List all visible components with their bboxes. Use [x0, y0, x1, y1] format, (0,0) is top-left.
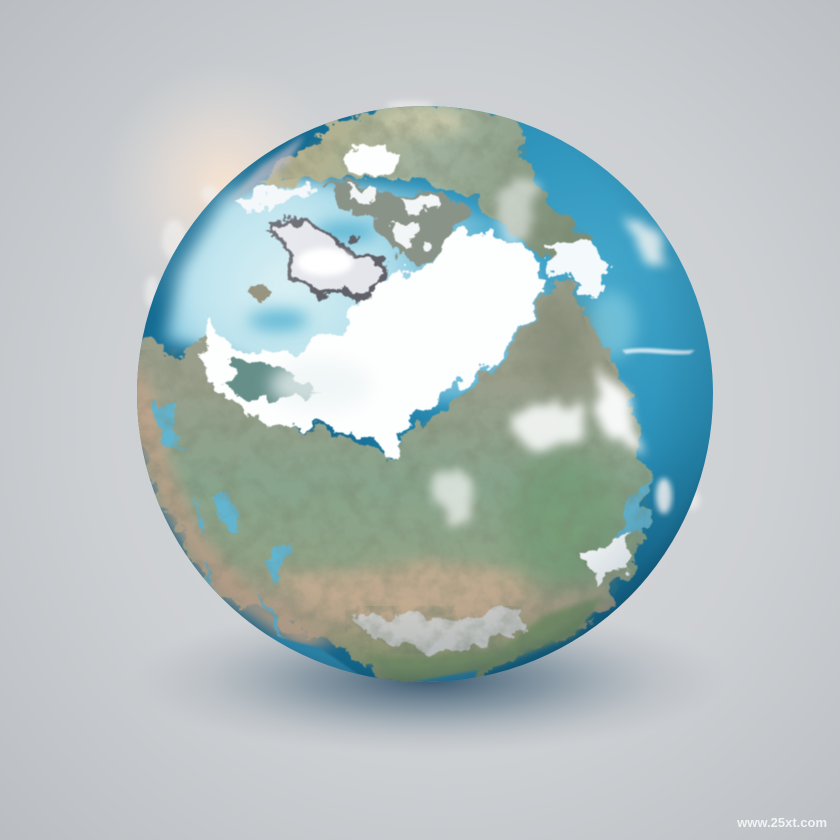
greenland snow highlight — [297, 248, 353, 276]
cloud on top land — [497, 171, 533, 239]
coastal ice near japan — [582, 534, 636, 586]
pale land at upper left limb — [225, 135, 305, 205]
ice cap on islands — [350, 146, 402, 176]
cloud at east limb — [656, 478, 672, 514]
landmasses — [130, 102, 652, 690]
tan central asia deserts — [270, 560, 540, 625]
upper left highlight — [140, 155, 320, 325]
cloud streak — [622, 348, 695, 354]
pacific side ice — [552, 238, 606, 298]
small island — [256, 282, 268, 302]
arctic sea ice — [198, 232, 552, 458]
sun glow — [60, 40, 380, 360]
cloud over central asia — [433, 467, 477, 523]
cloud over siberia — [510, 403, 590, 447]
ice and islands — [198, 146, 636, 586]
tibetan plateau snow — [350, 610, 522, 654]
sphere shading — [137, 106, 713, 682]
ice fragments on islands — [345, 186, 440, 246]
ice on left top land — [232, 184, 322, 214]
tan desert west — [130, 352, 340, 650]
canadian arctic islands — [325, 182, 468, 266]
kara sea inlet — [228, 364, 312, 404]
top landmass: north america — [262, 102, 590, 266]
turquoise sea patches — [248, 222, 506, 331]
terrain texture — [138, 106, 652, 682]
arctic shallow water — [165, 175, 560, 400]
pale plains on top landmass — [380, 109, 470, 135]
eastern coast cloud — [590, 365, 640, 450]
clouds — [433, 171, 672, 523]
eastern siberia darker tone — [532, 295, 588, 395]
greenland coast — [270, 216, 384, 300]
southern ocean at bottom — [266, 634, 478, 682]
main landmass: eurasia — [130, 275, 652, 690]
plateau texture — [345, 606, 525, 654]
cloud over pacific — [618, 218, 672, 268]
greenland — [276, 222, 378, 294]
cloud wisps behind limb — [145, 101, 700, 510]
globe — [130, 100, 720, 692]
watermark: www.25xt.com — [736, 815, 827, 830]
soft ice haze — [270, 360, 370, 410]
seas — [155, 400, 652, 638]
ground shadow — [130, 605, 730, 755]
siberian green — [510, 450, 620, 590]
pacific light sea — [588, 291, 636, 359]
ocean — [130, 100, 720, 690]
southern green land — [365, 595, 605, 684]
